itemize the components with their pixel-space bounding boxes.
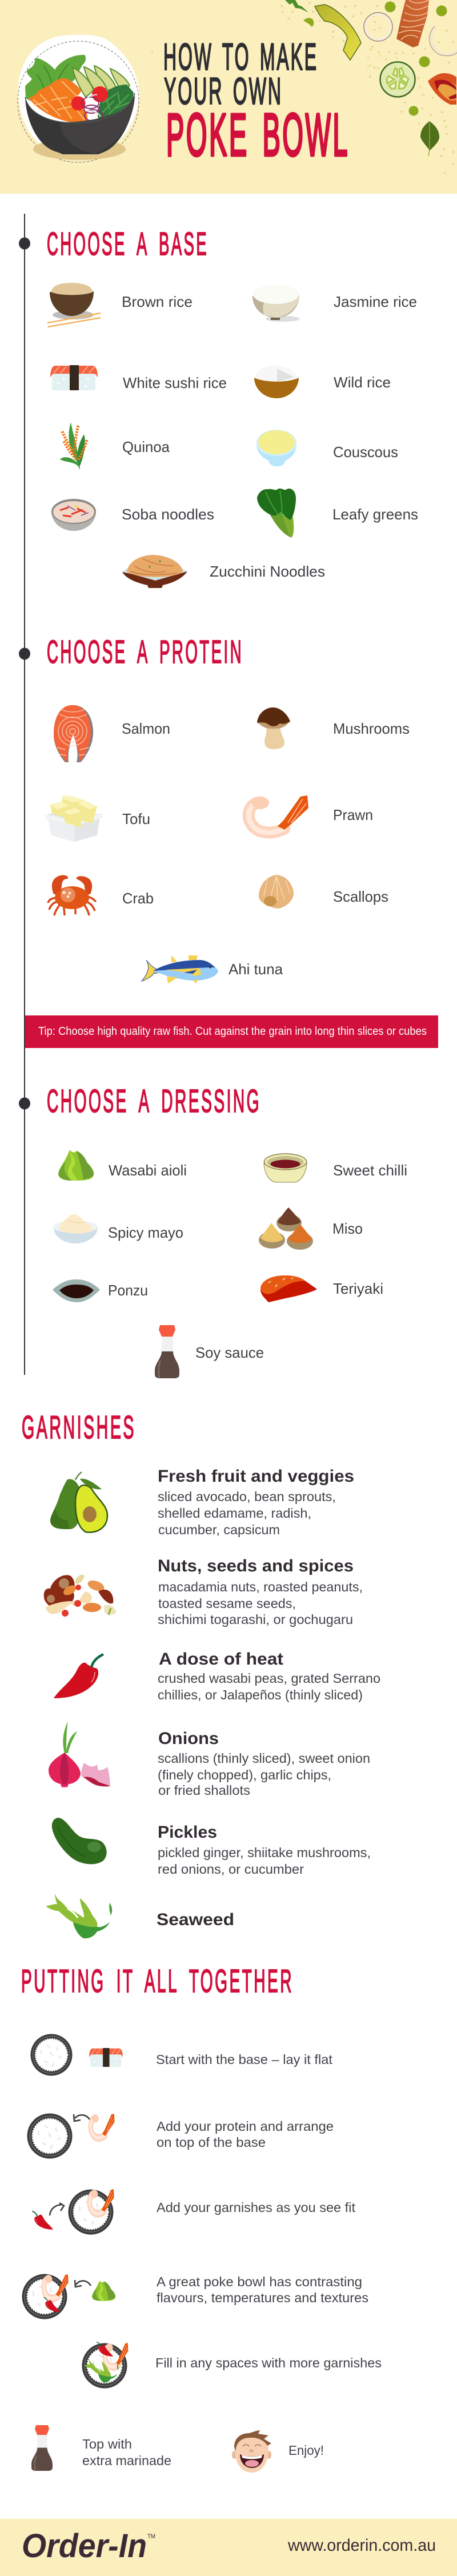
icon: onion	[49, 1721, 110, 1787]
text: Add your garnishes as you see fit	[157, 2200, 356, 2215]
label: Teriyaki	[333, 1280, 383, 1297]
icon: couscous	[256, 430, 296, 466]
text: fresh fruit list	[158, 1489, 336, 1537]
text: Enjoy!	[288, 2443, 324, 2458]
icon: wasabi	[92, 2281, 115, 2301]
text: nuts list: toasted sesame seeds,	[158, 1596, 296, 1611]
icon: mushrooms	[257, 707, 290, 749]
step 7	[232, 2430, 324, 2473]
section: protein options	[45, 705, 410, 983]
label: Quinoa	[122, 438, 170, 455]
icon: small leaf	[303, 18, 314, 27]
icon: salmon	[54, 705, 93, 762]
icon: plate with rice	[27, 2113, 72, 2159]
logo: TM	[147, 2533, 155, 2540]
icon: arrow	[50, 2203, 64, 2215]
text: Fill in any spaces with more garnishes	[155, 2355, 382, 2370]
label: Ahi tuna	[228, 961, 283, 978]
icon: soy sauce	[155, 1325, 179, 1378]
icon: tofu	[45, 795, 103, 842]
icon: tomato wedge	[428, 73, 456, 105]
text: onions list: (finely chopped), garlic chips,	[158, 1767, 331, 1782]
icon: seaweed	[46, 1894, 112, 1938]
label: Crab	[122, 890, 154, 907]
icon: ponzu	[53, 1279, 100, 1302]
text: heat list: crushed wasabi peas, grated Serrano	[158, 1671, 380, 1686]
icon: prawn	[248, 795, 308, 833]
heading: heat: A dose of heat	[159, 1650, 283, 1669]
icon: plate with prawn and chilli	[22, 2274, 69, 2319]
icon: full plate	[82, 2342, 128, 2389]
section: garnishes list	[44, 1467, 380, 1938]
icon: teriyaki	[260, 1275, 317, 1302]
label: Sweet chilli	[333, 1162, 407, 1179]
label: Mushrooms	[333, 720, 410, 737]
icon: chilli	[32, 2211, 53, 2230]
label: Soy sauce	[195, 1344, 264, 1361]
text: nuts list: macadamia nuts, roasted peanuts,	[158, 1579, 363, 1594]
heading: onions: Onions	[158, 1729, 219, 1748]
seaweed	[98, 85, 134, 119]
icon: plate with rice	[30, 2034, 73, 2076]
label: Spicy mayo	[108, 1224, 183, 1241]
label: Salmon	[122, 720, 170, 737]
text: Start with the base – lay it flat	[156, 2052, 333, 2067]
icon: arrow	[75, 2280, 91, 2287]
icon: brown rice	[47, 283, 101, 327]
step 2	[27, 2113, 334, 2159]
label: Soba noodles	[122, 506, 214, 523]
icon: leafy greens	[257, 489, 296, 538]
step 6	[31, 2425, 171, 2471]
icon: peas	[385, 1, 447, 115]
website: www.orderin.com.au	[287, 2536, 436, 2555]
callout: tip: Tip: Choose high quality raw fish. Cut against the grain into long thin slices or cubes	[38, 1025, 427, 1038]
text: nuts list: shichimi togarashi, or gochugaru	[158, 1612, 353, 1627]
callout: tip	[25, 1015, 438, 1048]
section: dressing options	[53, 1150, 407, 1378]
icon: ahi tuna	[142, 955, 218, 983]
icon: chilli	[54, 1654, 103, 1698]
section: steps	[22, 2034, 382, 2473]
icon: nuts	[44, 1575, 116, 1617]
tomato	[71, 86, 108, 111]
step 1	[30, 2034, 333, 2076]
icon: arrow	[74, 2114, 90, 2121]
salmon	[29, 78, 87, 123]
text: Top with	[82, 2437, 132, 2451]
text: nuts list	[158, 1579, 363, 1627]
icon: sushi	[89, 2048, 123, 2067]
icon: soy bottle	[31, 2425, 53, 2471]
icon: onion rings	[364, 13, 457, 56]
text: extra marinade	[82, 2453, 171, 2468]
label: Miso	[332, 1220, 363, 1237]
label: Brown rice	[122, 293, 193, 310]
section: base options	[47, 283, 418, 588]
label: Ponzu	[108, 1282, 148, 1299]
icon: salmon slab	[396, 0, 429, 47]
heading: seaweed: Seaweed	[157, 1910, 234, 1929]
icon: white sushi rice	[50, 365, 98, 390]
icon: spicy mayo	[53, 1214, 98, 1243]
icon: plate with prawn	[69, 2189, 114, 2234]
icon: spinach leaf	[420, 121, 439, 156]
timeline marker: dressing	[19, 1097, 30, 1110]
icon: rocket leaf	[285, 0, 308, 13]
label: Scallops	[333, 888, 388, 905]
icon: crab	[48, 875, 96, 915]
step 5	[82, 2342, 382, 2389]
icon: jasmine rice	[252, 285, 300, 322]
icon: sweet chilli	[264, 1154, 307, 1182]
illustration: poke bowl	[18, 35, 139, 162]
text: pickles list: pickled ginger, shiitake mushrooms,	[158, 1845, 371, 1860]
heading: nuts: Nuts, seeds and spices	[158, 1557, 354, 1575]
text: onions list	[158, 1751, 370, 1798]
text: on top of the base	[157, 2135, 266, 2150]
text	[157, 2274, 368, 2305]
title	[163, 35, 350, 169]
label: Tofu	[122, 810, 150, 827]
text: pickles list: red onions, or cucumber	[158, 1862, 304, 1877]
timeline marker: protein	[19, 648, 30, 659]
heading: pickles: Pickles	[158, 1823, 217, 1842]
icon: pickle	[52, 1818, 107, 1864]
text: fresh fruit list: shelled edamame, radish,	[158, 1506, 311, 1521]
icon: wasabi aioli	[58, 1150, 94, 1181]
label: White sushi rice	[123, 374, 227, 391]
label: Zucchini Noodles	[210, 563, 325, 580]
icon: scallops	[259, 875, 294, 909]
label: Wild rice	[334, 374, 391, 391]
icon: cucumber slice	[380, 62, 415, 97]
text: CHOOSE A BASE	[47, 226, 209, 262]
text: Add your protein and arrange	[157, 2119, 334, 2134]
label: Jasmine rice	[334, 293, 417, 310]
avocado slices	[73, 66, 130, 97]
red onion	[82, 95, 103, 121]
step 3	[32, 2189, 356, 2234]
text: heat list	[158, 1671, 380, 1702]
icon: soba noodles	[51, 499, 96, 531]
bowl	[25, 93, 135, 154]
sprinkled seeds	[151, 2, 454, 174]
icon: quinoa	[60, 422, 87, 470]
text: CHOOSE A PROTEIN	[47, 634, 243, 670]
label: Couscous	[333, 443, 398, 461]
label: Leafy greens	[332, 506, 418, 523]
text: onions list: scallions (thinly sliced), sweet onion	[158, 1751, 370, 1766]
timeline marker: base	[19, 238, 30, 249]
text	[157, 2119, 334, 2150]
icon: avocado slice	[315, 5, 361, 60]
icon: zucchini noodles	[122, 555, 187, 588]
timeline	[19, 214, 30, 1375]
icon: wild rice	[254, 366, 299, 398]
heading: fresh fruit: Fresh fruit and veggies	[158, 1467, 354, 1486]
text	[82, 2437, 171, 2468]
label: Wasabi aioli	[109, 1162, 187, 1179]
icon: avocado	[50, 1472, 107, 1532]
text: fresh fruit list: cucumber, capsicum	[158, 1522, 280, 1537]
text: A great poke bowl has contrasting	[157, 2274, 362, 2289]
text: onions list: or fried shallots	[158, 1783, 250, 1798]
icon: happy face	[232, 2430, 271, 2473]
text: pickles list	[158, 1845, 371, 1877]
heading: garnishes: GARNISHES	[22, 1409, 136, 1446]
text: flavours, temperatures and textures	[157, 2290, 368, 2305]
label: Prawn	[333, 806, 373, 823]
footer	[0, 2519, 457, 2576]
lettuce	[25, 55, 86, 103]
text: heat list: chillies, or Jalapeños (thinly sliced)	[158, 1687, 363, 1702]
text: fresh fruit list: sliced avocado, bean sprouts,	[158, 1489, 336, 1504]
title: YOUR OWN	[164, 70, 283, 112]
logo: Order-In	[22, 2527, 147, 2565]
icon: prawn	[91, 2114, 115, 2138]
header banner	[0, 0, 457, 194]
icon: miso	[259, 1207, 313, 1250]
step 4	[22, 2274, 368, 2319]
